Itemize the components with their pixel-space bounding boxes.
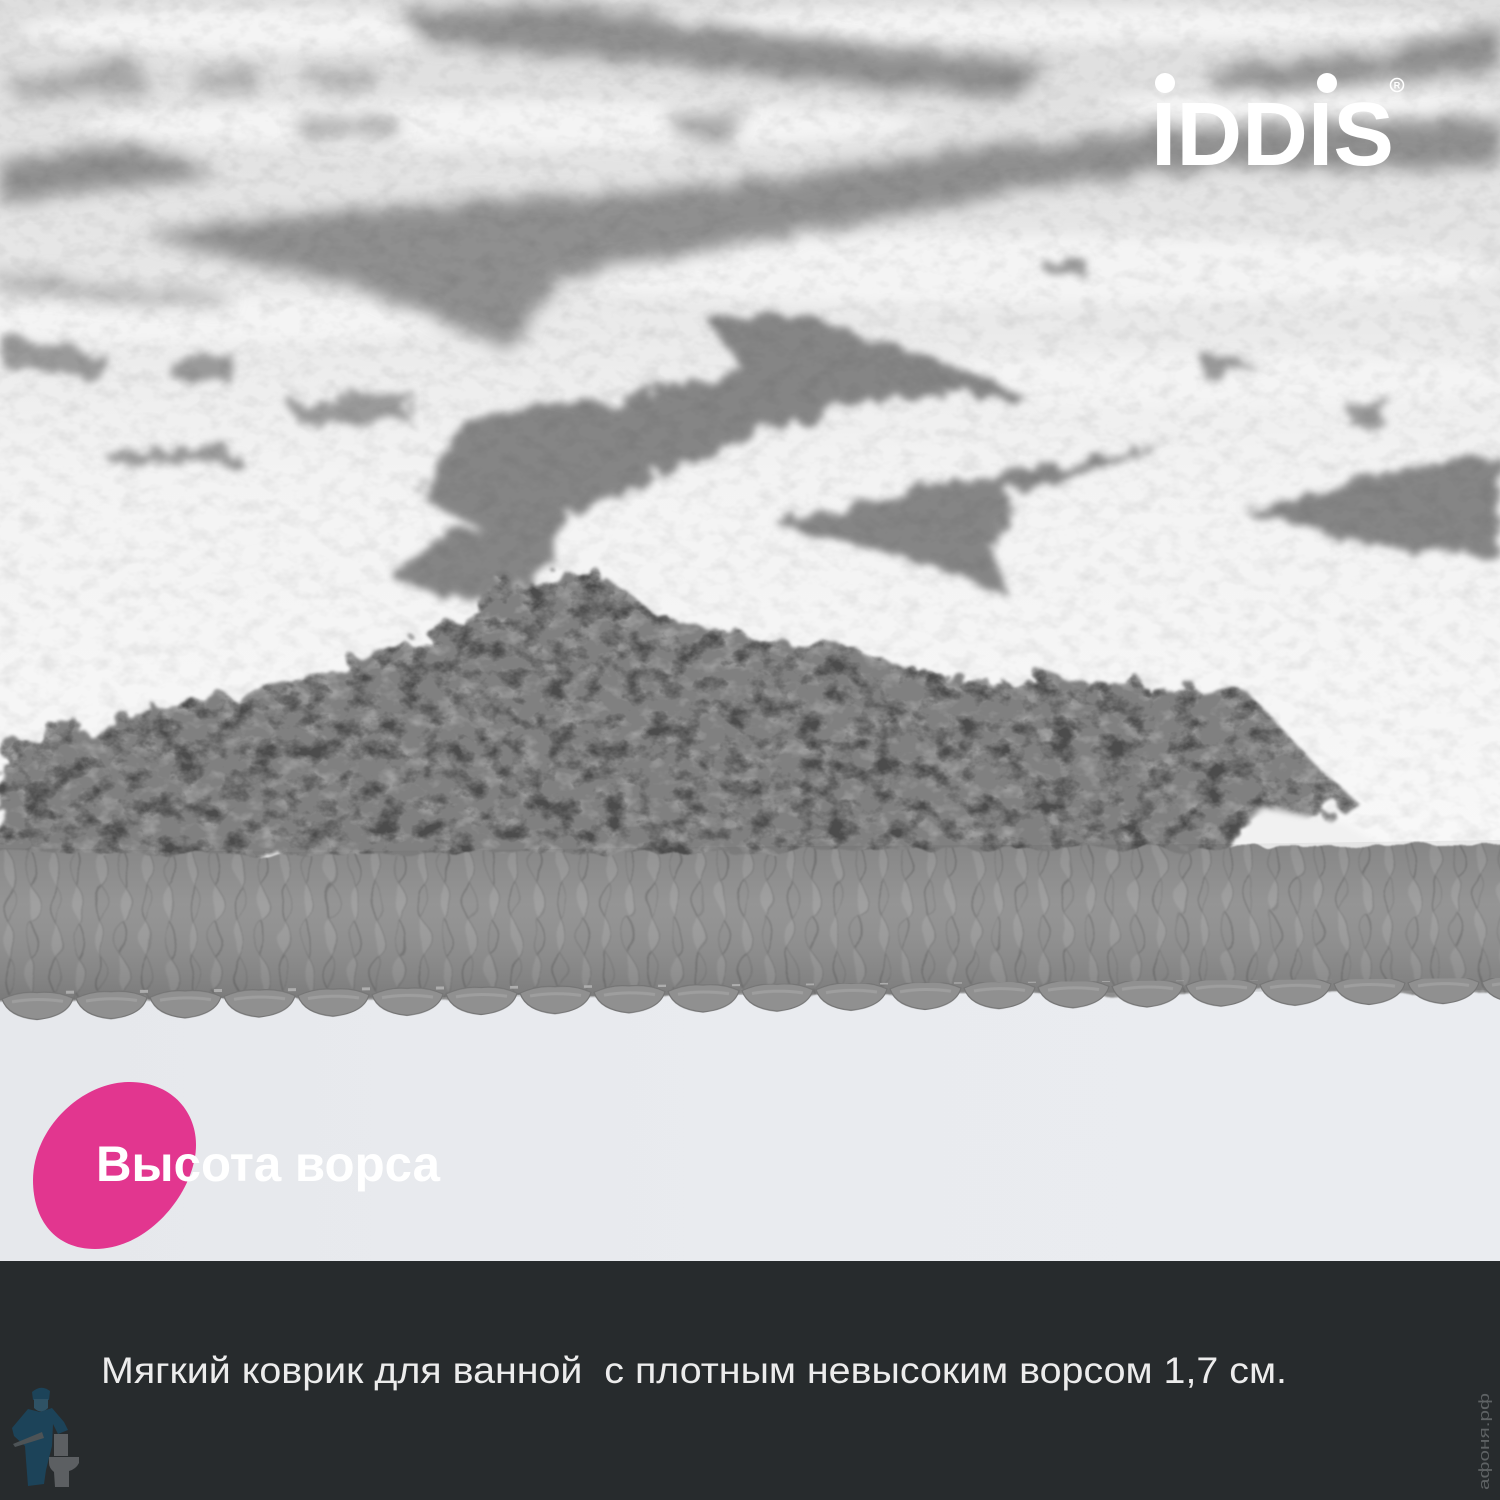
plumber figure (12, 1388, 68, 1486)
far grey pattern bands (0, 4, 1500, 348)
white background floor (0, 984, 1500, 1262)
logo wordmark: IDDIS (1151, 85, 1394, 185)
heading: Высота ворса (96, 1136, 441, 1192)
overlock stitching (0, 978, 1500, 1024)
toilet (49, 1434, 79, 1487)
white corner tuft (1232, 806, 1384, 848)
registered mark (1390, 78, 1404, 92)
watermark site name: афоня.рф (1476, 1393, 1493, 1490)
icon: plumber with toilet watermark (12, 1388, 79, 1487)
mid grey pattern patches (388, 314, 1500, 604)
pink blob badge (33, 1082, 196, 1249)
logo: iddis (1151, 73, 1404, 185)
rope edge binding (0, 844, 1500, 1002)
dark caption band (0, 1261, 1500, 1500)
far faint pattern spots (0, 56, 755, 308)
rug white pile base (0, 0, 1500, 860)
logo dots (1155, 73, 1337, 93)
subtle pile noise texture (0, 0, 1500, 860)
near grey tufted pile (0, 572, 1360, 862)
light streaks in far pile (0, 7, 1500, 406)
caption text: Мягкий коврик для ванной с плотным невысоким ворсом 1,7 см. (101, 1350, 1287, 1391)
mid faint pattern spots (0, 258, 1394, 462)
rope shading (0, 840, 1500, 1000)
registered mark: R (1394, 80, 1401, 90)
